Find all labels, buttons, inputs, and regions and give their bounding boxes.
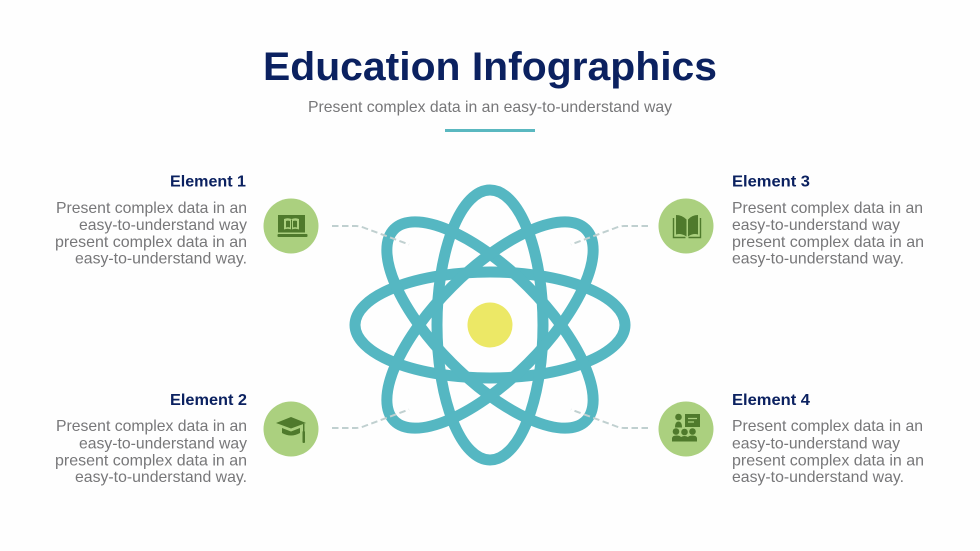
- text block: present complex data in an: [55, 452, 247, 470]
- subtitle: Present complex data in an easy-to-understand way: [308, 99, 672, 116]
- text block: Present complex data in an: [732, 418, 923, 435]
- title: Education Infographics: [263, 45, 717, 89]
- atom nucleus: [468, 302, 512, 348]
- icon: presenter with audience: [658, 402, 714, 456]
- title underline: [445, 129, 535, 132]
- text block: present complex data in an: [55, 234, 247, 251]
- text block: Present complex data in an: [56, 418, 247, 435]
- text block: [55, 200, 247, 268]
- heading: Element 4: [732, 392, 810, 409]
- atom orbits: [355, 190, 625, 460]
- icon: graduation cap: [264, 402, 318, 456]
- text block: easy-to-understand way: [79, 217, 247, 234]
- panel: element 2: [55, 392, 318, 486]
- icon: open book: [658, 198, 714, 254]
- panel: element 1: [55, 174, 318, 268]
- connector lines: [332, 226, 648, 428]
- text block: easy-to-understand way: [732, 436, 900, 452]
- heading: Element 1: [170, 174, 246, 190]
- text block: [732, 418, 924, 486]
- text block: Present complex data in an: [732, 200, 923, 217]
- text block: easy-to-understand way: [732, 217, 900, 234]
- heading: Element 3: [732, 174, 810, 190]
- panel: element 4: [658, 392, 924, 486]
- icon: laptop with book: [264, 198, 318, 254]
- text block: easy-to-understand way.: [75, 250, 247, 268]
- text block: [732, 200, 924, 268]
- heading: Element 2: [170, 392, 247, 409]
- atom diagram: [355, 190, 625, 460]
- text block: easy-to-understand way.: [732, 469, 904, 486]
- text block: present complex data in an: [732, 234, 924, 251]
- text block: easy-to-understand way: [79, 436, 247, 452]
- text block: [55, 418, 247, 486]
- text block: easy-to-understand way.: [732, 250, 904, 268]
- text block: present complex data in an: [732, 452, 924, 470]
- text block: easy-to-understand way.: [75, 469, 247, 486]
- text block: Present complex data in an: [56, 200, 247, 217]
- panel: element 3: [658, 174, 924, 268]
